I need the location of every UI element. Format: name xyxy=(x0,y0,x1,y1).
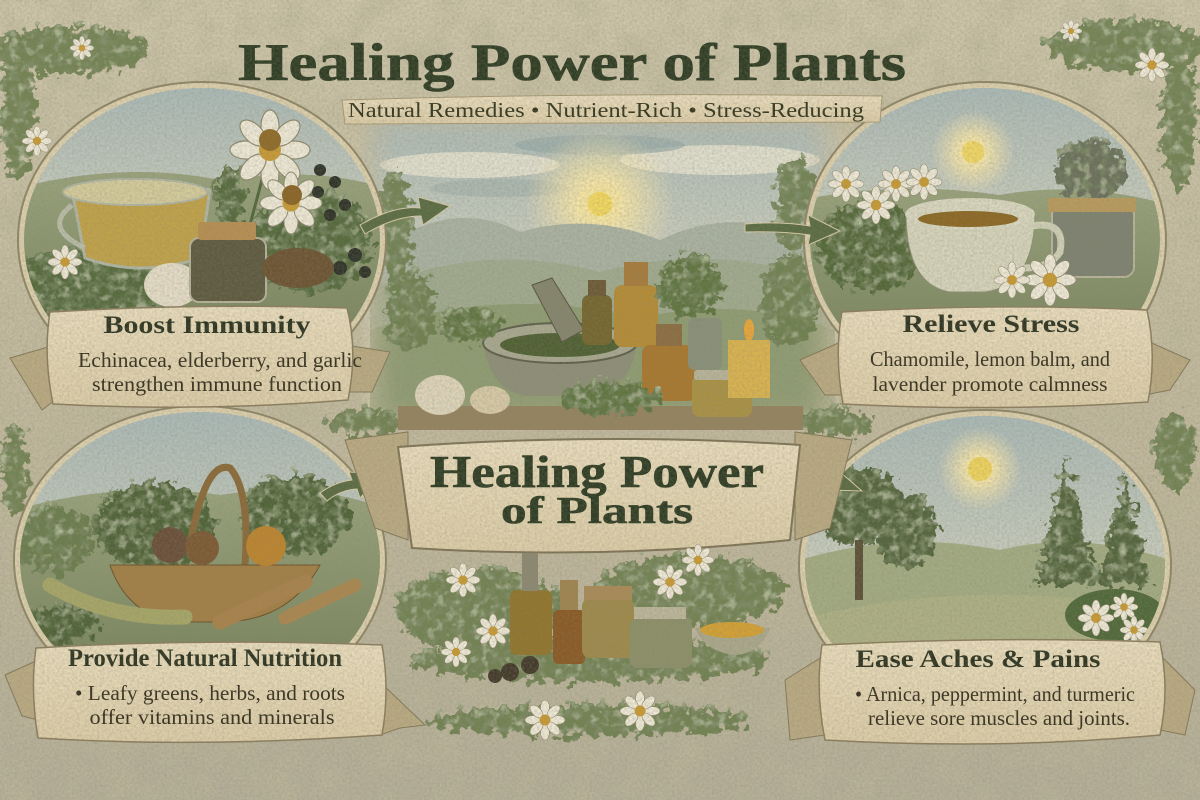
corner flowers xyxy=(22,20,1169,156)
panel: boost immunity caption: Echinacea, elderberry, and garlic xyxy=(78,348,362,372)
arrow: nutrition to centre xyxy=(320,472,382,501)
panel: boost immunity caption: Boost Immunity xyxy=(104,312,311,339)
panel: ease aches caption: relieve sore muscles and joints. xyxy=(868,706,1130,730)
panel: relieve stress circle xyxy=(803,81,1167,334)
panel: ease aches caption: • Arnica, peppermint, and turmeric xyxy=(855,682,1135,706)
panel: ease aches caption: Ease Aches & Pains xyxy=(856,646,1101,673)
central banner xyxy=(345,432,852,552)
icon: forest trees xyxy=(807,455,1150,585)
panel: natural nutrition caption: • Leafy greens, herbs, and roots xyxy=(75,681,345,705)
arrow: immunity to centre xyxy=(360,197,450,234)
panel: ease aches caption xyxy=(785,640,1195,744)
icon: chamomile flowers xyxy=(828,164,1076,306)
panel: ease aches circle xyxy=(798,409,1172,644)
icon: tea cup xyxy=(905,198,1061,292)
panel: relieve stress caption: Relieve Stress xyxy=(902,311,1080,338)
central banner: of Plants xyxy=(501,490,693,532)
mortar, bottles and candle still life xyxy=(398,253,803,430)
foliage behind the cup xyxy=(815,140,1126,290)
subtitle banner: Natural Remedies • Nutrient-Rich • Stress-Reducing xyxy=(348,98,865,122)
icon: flowers and leaves xyxy=(1065,589,1159,640)
title: Healing Power of Plants xyxy=(238,34,906,92)
panel: natural nutrition caption: offer vitamins and minerals xyxy=(90,705,334,729)
central landscape xyxy=(360,110,840,430)
panel: relieve stress caption: Chamomile, lemon balm, and xyxy=(870,347,1110,371)
arrow: centre to aches xyxy=(808,470,862,491)
panel: relieve stress caption xyxy=(800,307,1190,408)
panel: natural nutrition circle xyxy=(13,407,387,647)
icon: echinacea flowers xyxy=(230,110,322,240)
subtitle banner xyxy=(342,95,882,124)
panel: natural nutrition caption: Provide Natural Nutrition xyxy=(68,645,342,672)
arrow: centre to stress xyxy=(745,215,840,245)
icon: lavender jar xyxy=(1048,198,1136,277)
icon: garlic and jar xyxy=(48,222,334,307)
icon: roots and squash xyxy=(50,582,355,622)
icon: vegetable basket xyxy=(110,467,320,622)
icon: tea cup xyxy=(60,179,210,268)
panel: boost immunity circle xyxy=(17,81,387,333)
panel: natural nutrition caption xyxy=(5,642,425,742)
panel: relieve stress caption: lavender promote calmness xyxy=(872,372,1108,396)
foliage behind the still life xyxy=(2,167,372,323)
panel: boost immunity caption: strengthen immune function xyxy=(92,372,343,396)
foliage behind the basket xyxy=(15,475,350,645)
lower still life: oils and jars xyxy=(441,544,770,740)
panel: boost immunity caption xyxy=(10,306,390,410)
icon: berries xyxy=(312,164,371,278)
central banner: Healing Power xyxy=(430,446,764,497)
